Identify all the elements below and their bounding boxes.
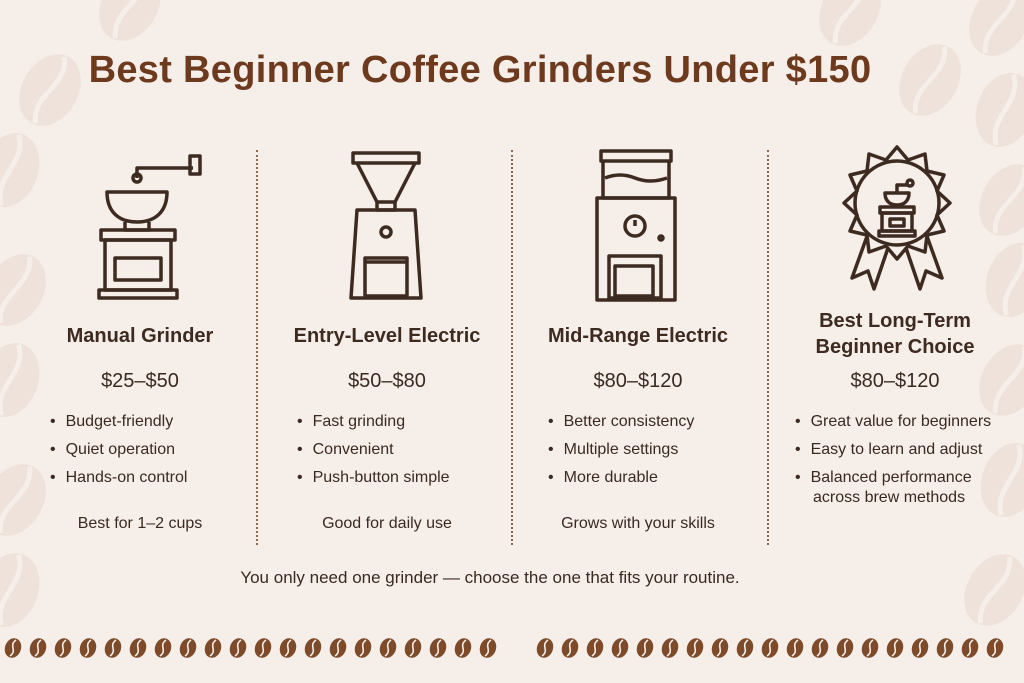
list: Hands-on control — [66, 469, 187, 486]
bean border — [4, 638, 1004, 658]
icon: mid-range electric — [595, 149, 677, 302]
heading — [816, 310, 974, 358]
list: Push-button simple — [313, 469, 450, 486]
list: Better consistency — [564, 413, 694, 430]
panel: entry-level — [294, 151, 480, 532]
list — [298, 413, 450, 486]
list: Fast grinding — [313, 413, 405, 430]
list: Easy to learn and adjust — [811, 441, 982, 458]
price: $80–$120 — [594, 370, 682, 392]
note: Best for 1–2 cups — [78, 515, 202, 532]
note: Good for daily use — [322, 515, 452, 532]
icon: manual grinder — [97, 154, 202, 300]
icon: entry electric — [349, 151, 423, 300]
footer text: You only need one grinder — choose the one that fits your routine. — [240, 568, 740, 587]
price: $50–$80 — [348, 370, 426, 392]
heading: Manual Grinder — [67, 325, 213, 347]
panel: mid-range — [548, 149, 728, 532]
list: across brew methods — [813, 489, 965, 506]
panel: manual grinder — [50, 154, 213, 532]
panel: best choice — [796, 145, 991, 506]
list — [548, 413, 694, 486]
heading: Mid-Range Electric — [548, 325, 728, 347]
price: $25–$50 — [101, 370, 179, 392]
list: Budget-friendly — [66, 413, 173, 430]
list — [796, 413, 991, 506]
list: More durable — [564, 469, 658, 486]
list: Multiple settings — [564, 441, 678, 458]
list: Convenient — [313, 441, 394, 458]
note: Grows with your skills — [561, 515, 715, 532]
list: Balanced performance — [811, 469, 972, 486]
list: Quiet operation — [66, 441, 175, 458]
price: $80–$120 — [850, 370, 939, 392]
heading: Beginner Choice — [816, 336, 974, 358]
heading: Best Long-Term — [819, 310, 971, 332]
title: Best Beginner Coffee Grinders Under $150 — [89, 49, 871, 91]
icon: award badge — [842, 145, 952, 291]
list — [50, 413, 187, 486]
heading: Entry-Level Electric — [294, 325, 480, 347]
list: Great value for beginners — [811, 413, 991, 430]
